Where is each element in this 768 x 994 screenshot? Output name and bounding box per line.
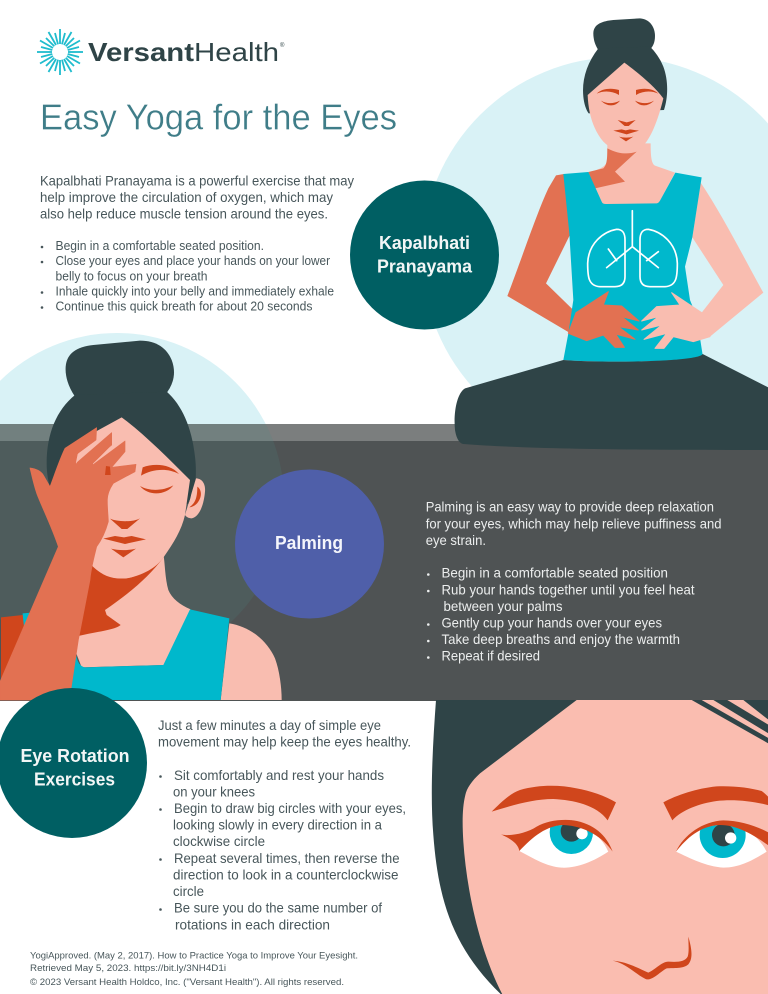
shoulder <box>221 623 282 700</box>
badge: Kapalbhati Pranayama <box>350 180 499 330</box>
text block: palming intro <box>426 500 722 548</box>
list: kapalbhati steps <box>41 239 334 314</box>
list: eye rotation steps: looking slowly in every direction in a <box>173 818 382 833</box>
neck shadow <box>588 148 637 188</box>
background circle: top right <box>436 59 768 387</box>
facial features <box>597 89 658 141</box>
list: palming steps: Repeat if desired <box>442 649 540 664</box>
neck and chest <box>588 143 675 204</box>
tank top <box>563 172 703 362</box>
list: eye rotation steps: Begin to draw big circles with your eyes, <box>174 801 406 816</box>
figure: seated woman with lungs <box>455 18 768 450</box>
list: kapalbhati steps: Continue this quick breath for about 20 seconds <box>56 300 312 314</box>
neck and chest <box>75 553 191 667</box>
hair strands <box>692 700 768 744</box>
footer: source and copyright: © 2023 Versant Health Holdco, Inc. ("Versant Health"). All rights reserved. <box>30 976 344 987</box>
arm shadowed <box>507 174 639 347</box>
list: eye rotation steps: on your knees <box>173 784 255 800</box>
text block: palming intro: for your eyes, which may help relieve puffiness and <box>426 516 722 531</box>
list: palming steps: Begin in a comfortable seated position <box>442 566 668 581</box>
hair bun <box>66 341 174 397</box>
ear <box>185 478 205 518</box>
list: kapalbhati steps: Begin in a comfortable seated position. <box>56 239 264 253</box>
neck shadow <box>78 557 164 636</box>
figure: close-up face with open eyes <box>432 700 768 994</box>
footer: source and copyright <box>30 950 358 987</box>
list: kapalbhati steps: belly to focus on your breath <box>56 270 208 284</box>
badge: Palming <box>235 470 384 618</box>
text block: palming intro: Palming is an easy way to provide deep relaxation <box>426 500 714 515</box>
facial features <box>103 465 179 557</box>
badge: Eye Rotation Exercises: Exercises <box>34 769 115 790</box>
wordmark: Versant <box>88 37 194 67</box>
figure: woman palming <box>0 341 282 700</box>
logo: ® <box>280 42 285 49</box>
list: eye rotation steps: direction to look in a counterclockwise <box>173 868 399 882</box>
list: eye rotation steps: rotations in each direction <box>175 918 330 932</box>
list: eye rotation steps <box>159 768 406 932</box>
list: eye rotation steps: clockwise circle <box>173 834 265 849</box>
hands over top <box>568 292 639 347</box>
badge: Eye Rotation Exercises: Eye Rotation <box>20 745 130 766</box>
list: palming steps: Rub your hands together until you feel heat <box>442 582 695 597</box>
hair <box>583 47 667 113</box>
list: eye rotation steps: circle <box>173 884 204 899</box>
right eye <box>676 820 768 868</box>
face <box>65 417 190 579</box>
list: eye rotation steps: Be sure you do the same number of <box>174 901 382 916</box>
background circle: palming <box>0 333 266 424</box>
skirt <box>455 354 768 450</box>
arm and hand <box>0 428 136 700</box>
text block: kapalbhati intro: also help reduce muscle tension around the eyes. <box>40 207 328 222</box>
text block: kapalbhati intro <box>40 174 354 222</box>
text block: kapalbhati intro: help improve the circulation of oxygen, which may <box>40 190 333 205</box>
list: eye rotation steps: Sit comfortably and rest your hands <box>174 768 384 783</box>
list: kapalbhati steps: Inhale quickly into your belly and immediately exhale <box>56 284 334 298</box>
text block: kapalbhati intro: Kapalbhati Pranayama is a powerful exercise that may <box>40 174 354 188</box>
title: Easy Yoga for the Eyes <box>40 96 397 138</box>
ear inner <box>189 487 201 507</box>
list: kapalbhati steps: Close your eyes and place your hands on your lower <box>56 254 330 268</box>
arm light <box>642 183 763 348</box>
teal strap left <box>23 613 32 663</box>
tank top <box>69 609 229 700</box>
face <box>463 700 768 994</box>
hair <box>47 392 196 504</box>
nose <box>613 937 691 979</box>
badge: Palming: Palming <box>275 533 343 553</box>
hair flick by ear <box>188 478 192 504</box>
list: palming steps: between your palms <box>444 599 563 614</box>
text block: palming intro: eye strain. <box>426 533 486 548</box>
sleeve shadow <box>1 615 24 680</box>
text block: eye rotation intro <box>158 718 411 750</box>
icon: lungs <box>588 211 677 287</box>
text block: eye rotation intro: Just a few minutes a day of simple eye <box>158 718 381 733</box>
eyebrows <box>492 786 768 820</box>
list: eye rotation steps: Repeat several times, then reverse the <box>174 851 400 866</box>
icon: sunburst <box>37 29 83 75</box>
badge: Kapalbhati Pranayama: Kapalbhati <box>379 233 470 253</box>
logo: Health <box>194 37 279 67</box>
text block: eye rotation intro: movement may help keep the eyes healthy. <box>158 735 411 750</box>
finger highlights <box>76 440 112 464</box>
list: palming steps: Take deep breaths and enjoy the warmth <box>442 632 680 647</box>
face <box>588 63 663 153</box>
left eye <box>501 820 612 868</box>
palming band background <box>0 424 768 701</box>
list: palming steps <box>427 566 695 664</box>
logo <box>37 29 285 75</box>
badge: Eye Rotation Exercises <box>0 688 147 838</box>
footer: source and copyright: Retrieved May 5, 2023. https://bit.ly/3NH4D1i <box>30 962 226 973</box>
badge: Kapalbhati Pranayama: Pranayama <box>377 257 473 277</box>
hair bun <box>593 18 655 50</box>
hair <box>432 700 576 994</box>
list: palming steps: Gently cup your hands over your eyes <box>442 615 662 630</box>
footer: source and copyright: YogiApproved. (May 2, 2017). How to Practice Yoga to Improve Your Eyesight. <box>30 950 358 961</box>
